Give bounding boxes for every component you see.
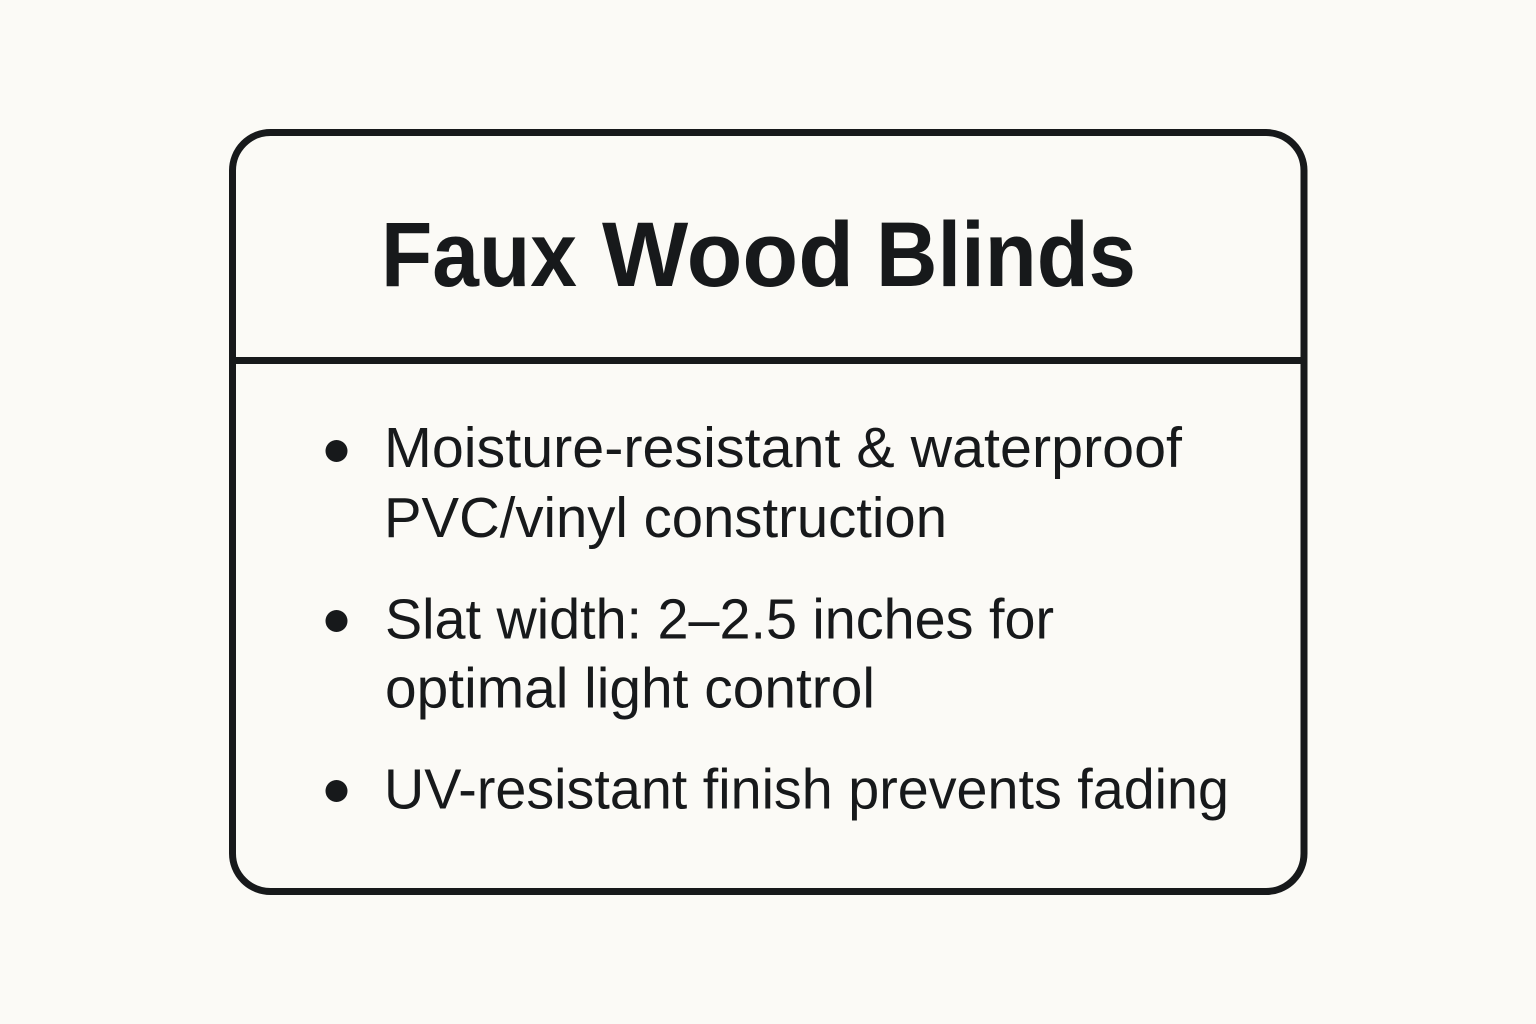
title: Blinds — [876, 204, 1136, 306]
title: Faux — [381, 204, 577, 306]
title — [381, 204, 1136, 306]
panel: faux wood blinds card — [232, 132, 1304, 892]
title: Wood — [602, 204, 854, 306]
bullet item: moisture resistance — [326, 416, 1182, 549]
bullet item: slat width: Slat width: 2–2.5 inches for — [385, 588, 1054, 650]
bullet item: UV finish: UV-resistant finish prevents fading — [384, 758, 1229, 820]
bullet item: slat width: optimal light control — [385, 656, 875, 720]
bullet item: moisture resistance: PVC/vinyl construction — [384, 486, 947, 549]
bullet item: moisture resistance: Moisture-resistant & waterproof — [384, 416, 1182, 479]
bullet item: slat width — [326, 588, 1054, 720]
